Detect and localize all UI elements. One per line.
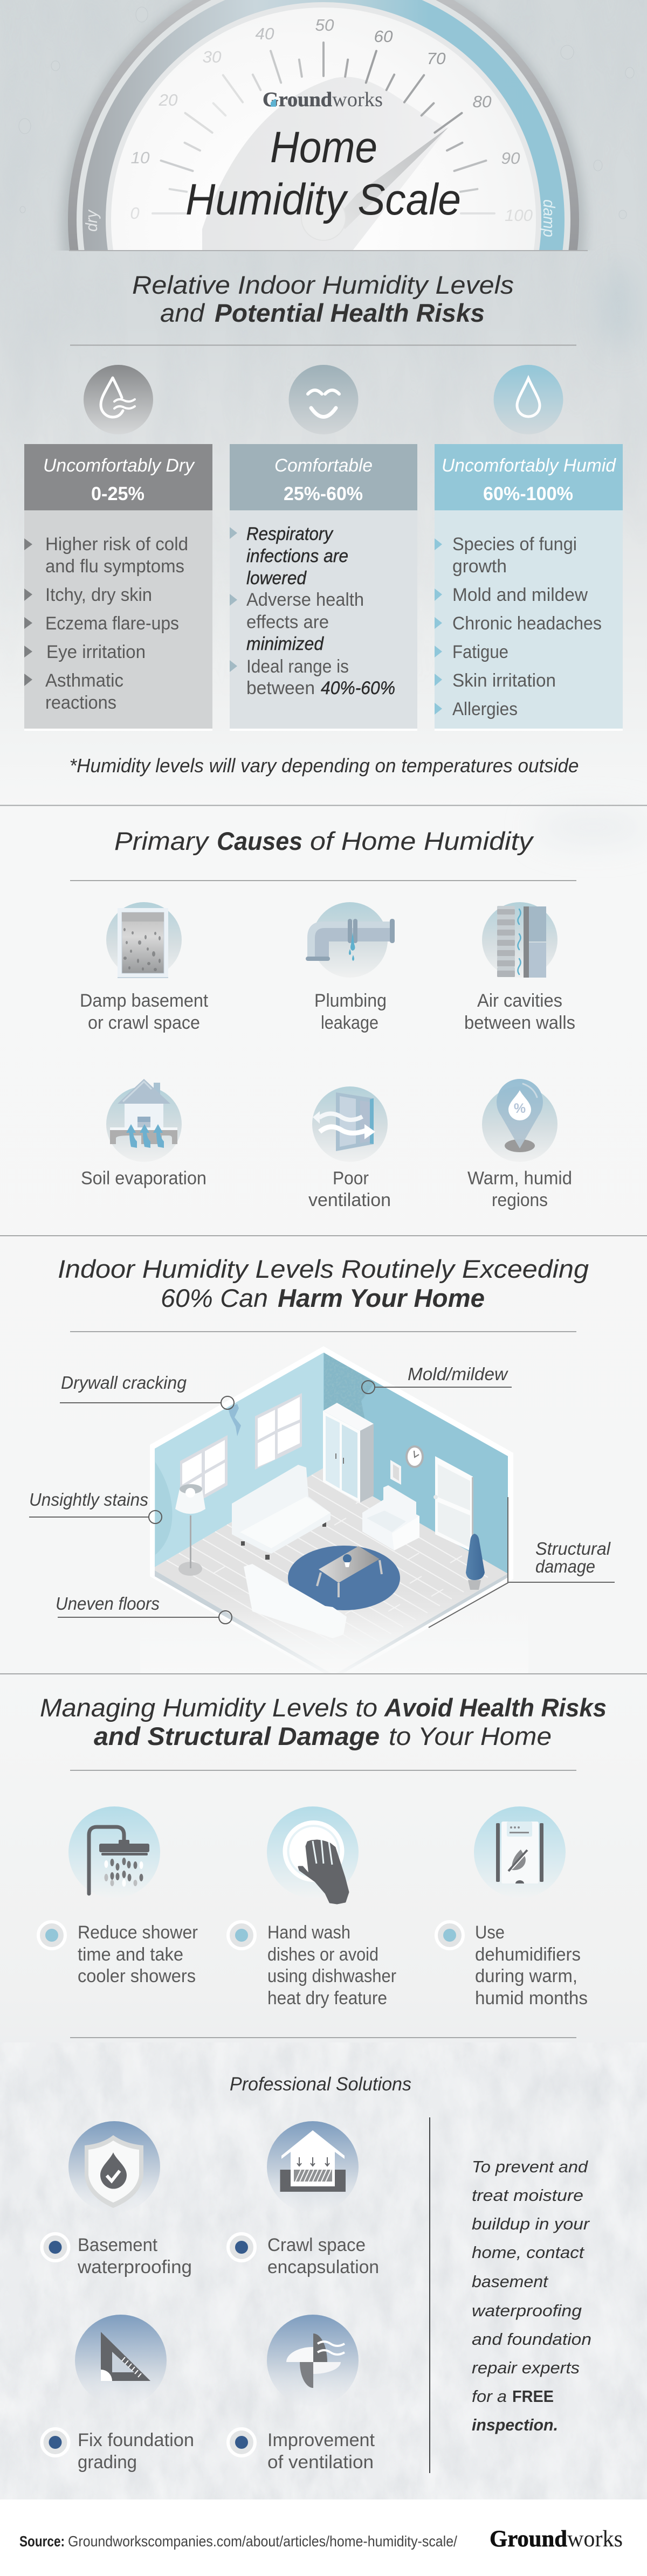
callout: unsightly stains [29, 1490, 162, 1524]
text: using dishwasher [267, 1966, 396, 1986]
gauge base line [69, 250, 588, 251]
footer logo: works [567, 2526, 623, 2552]
panel: uncomfortably dry: and flu symptoms [45, 556, 184, 577]
text: Crawl space [267, 2235, 366, 2255]
panel: comfortable: Comfortable [274, 455, 373, 476]
floor edge [155, 1570, 508, 1679]
panel: uncomfortably humid: 60%-100% [483, 483, 573, 504]
floor fade [140, 1609, 528, 1674]
heading: managing humidity levels: to Your Home [389, 1722, 552, 1750]
wall stain [155, 1462, 173, 1555]
isometric room illustration [150, 1346, 513, 1661]
heading: relative indoor humidity levels: Potential Health Risks [215, 299, 485, 327]
panel: comfortable: 25%-60% [284, 483, 363, 504]
callout: uneven floors: Uneven floors [56, 1594, 160, 1614]
text: heat dry feature [267, 1988, 387, 2009]
text: encapsulation [267, 2257, 379, 2277]
heading: primary causes: Causes [217, 827, 302, 855]
gauge needle [344, 127, 449, 228]
plant [466, 1534, 485, 1590]
text [78, 1922, 198, 1986]
heading: managing humidity levels: Managing Humidity Levels to [40, 1693, 377, 1722]
text: humid months [475, 1988, 588, 2009]
right wall [324, 1353, 508, 1575]
panel: uncomfortably humid: growth [452, 556, 507, 577]
call to action: repair experts [472, 2358, 580, 2377]
left wall [155, 1353, 324, 1567]
label: leakage [321, 1013, 378, 1033]
solution: improvement of ventilation [228, 2315, 375, 2473]
panel: uncomfortably humid: Mold and mildew [452, 585, 588, 605]
rim label dry: dry [82, 209, 101, 232]
gauge numbers: 90 [501, 149, 520, 168]
panel: uncomfortably humid: Allergies [452, 699, 518, 719]
text: Improvement [267, 2430, 375, 2450]
solution: crawl space encapsulation [228, 2121, 379, 2277]
panel: comfortable [230, 444, 417, 731]
heading: harm your home: Harm Your Home [278, 1284, 485, 1312]
label [308, 1168, 391, 1210]
label: Poor [333, 1168, 369, 1189]
panel: uncomfortably humid: Fatigue [452, 642, 508, 662]
call to action: buildup in your [472, 2214, 590, 2233]
panel: uncomfortably dry: Itchy, dry skin [45, 585, 152, 605]
text: dehumidifiers [475, 1944, 581, 1965]
label: Damp basement [80, 991, 209, 1011]
panel: comfortable: Adverse health [246, 590, 364, 610]
gauge numbers: 50 [315, 16, 334, 34]
heading: managing humidity levels: and Structural Damage [94, 1722, 380, 1750]
heading: primary causes [114, 827, 534, 855]
bullet [436, 1922, 463, 1949]
text [267, 2235, 379, 2277]
heading: professional solutions: Professional Solutions [230, 2074, 411, 2095]
water droplets [19, 7, 634, 219]
floor [155, 1468, 508, 1675]
heading: relative indoor humidity levels: Relative Indoor Humidity Levels [132, 271, 514, 299]
heading: harm your home: Indoor Humidity Levels Routinely Exceeding [58, 1255, 589, 1283]
gauge numbers: 80 [472, 92, 492, 111]
footnote: *Humidity levels will vary depending on temperatures outside [69, 754, 579, 777]
heading: primary causes: of Home Humidity [310, 827, 534, 855]
text: Reduce shower [78, 1922, 198, 1943]
bullet [228, 2234, 255, 2261]
callout: drywall cracking [60, 1373, 234, 1409]
label: Soil evaporation [81, 1168, 207, 1189]
heading: harm your home: 60% Can [161, 1284, 268, 1312]
gauge numbers [130, 16, 533, 225]
text: during warm, [475, 1966, 577, 1986]
gauge numbers: 0 [130, 204, 140, 223]
panel: uncomfortably humid: Chronic headaches [452, 613, 602, 634]
text: waterproofing [77, 2257, 192, 2277]
call to action: home, contact [472, 2243, 584, 2262]
panel: comfortable: minimized [246, 634, 324, 654]
gauge ticks [153, 43, 494, 213]
tip: dehumidifier [436, 1806, 588, 2009]
cause: poor ventilation [308, 1086, 391, 1210]
call to action: waterproofing [472, 2301, 582, 2320]
side window [180, 1435, 228, 1512]
call to action: inspection. [472, 2415, 558, 2434]
label: Air cavities [477, 991, 562, 1011]
text: dishes or avoid [267, 1944, 378, 1965]
dial shadow [202, 77, 448, 253]
gauge numbers: 10 [130, 148, 150, 167]
bullet [42, 2429, 69, 2456]
text: Use [475, 1922, 505, 1943]
source line: Groundworkscompanies.com/about/articles/home-humidity-scale/ [68, 2533, 457, 2550]
text [267, 2430, 375, 2473]
panel: comfortable: lowered [246, 568, 307, 588]
callout: mold/mildew: Mold/mildew [408, 1364, 508, 1384]
gauge [58, 0, 589, 251]
panel: uncomfortably humid: Skin irritation [452, 670, 556, 691]
callout: mold/mildew [362, 1364, 512, 1394]
logo [263, 88, 383, 111]
callout: drywall cracking: Drywall cracking [61, 1373, 187, 1393]
cause: warm humid regions [467, 1079, 572, 1210]
logo: Ground [263, 88, 332, 111]
text: Basement [78, 2235, 158, 2255]
bullet [228, 2429, 255, 2456]
call to action: treat moisture [472, 2186, 583, 2205]
callout: uneven floors [56, 1594, 232, 1624]
panel: uncomfortably dry [24, 444, 212, 731]
wardrobe [323, 1403, 374, 1502]
label: Plumbing [314, 991, 387, 1011]
panel: comfortable: Ideal range is [246, 656, 349, 677]
heading: relative indoor humidity levels: and [160, 299, 205, 327]
title [185, 123, 461, 224]
callout: structural damage: Structural [535, 1539, 611, 1559]
text: time and take [78, 1944, 183, 1965]
panel: uncomfortably humid [435, 444, 623, 731]
cause: air cavities [464, 902, 575, 1033]
wall clock [405, 1445, 424, 1468]
heading: relative indoor humidity levels [132, 271, 514, 327]
heading: primary causes: Primary [114, 827, 210, 855]
panel: comfortable: effects are [246, 612, 329, 633]
label: regions [492, 1190, 548, 1210]
gauge numbers: 40 [256, 24, 274, 43]
icon: dry drop [84, 365, 153, 434]
text: grading [78, 2452, 137, 2473]
floor planks [167, 1475, 488, 1663]
needle pivot [301, 196, 346, 240]
gauge numbers: 60 [374, 27, 393, 46]
solution: fix foundation grading [42, 2315, 194, 2473]
cause: warm humid regions: % [514, 1101, 526, 1116]
call to action: basement [472, 2272, 548, 2291]
sofa [232, 1465, 331, 1560]
text [267, 1922, 396, 2009]
cause: damp basement [80, 902, 209, 1033]
icon: smile [289, 365, 358, 434]
cause: soil evaporation [81, 1079, 207, 1189]
tip: shower [38, 1806, 198, 1986]
label [314, 991, 387, 1033]
callout: structural damage [429, 1497, 615, 1628]
gauge numbers: 30 [203, 47, 221, 66]
label: or crawl space [88, 1013, 200, 1033]
heading: harm your home [58, 1255, 589, 1312]
panel: uncomfortably dry: Uncomfortably Dry [43, 455, 195, 476]
panel: comfortable: Respiratory [246, 524, 334, 544]
bullet [38, 1922, 65, 1949]
cause: plumbing leakage [306, 902, 395, 1033]
call to action: FREE [512, 2387, 554, 2406]
coffee table [317, 1546, 382, 1597]
panel: uncomfortably dry: Asthmatic [45, 670, 123, 691]
room border [150, 1346, 513, 1622]
panel: uncomfortably humid: Species of fungi [452, 534, 577, 555]
solution: basement waterproofing [42, 2121, 192, 2277]
label: ventilation [308, 1190, 391, 1210]
floor lamp [175, 1484, 205, 1576]
rim label damp: damp [540, 199, 559, 237]
wall vent [390, 1460, 401, 1485]
text: Hand wash [267, 1922, 350, 1943]
panel: comfortable: between [246, 678, 315, 698]
panel: uncomfortably dry: Higher risk of cold [45, 534, 188, 555]
text [77, 2235, 192, 2277]
panel: comfortable: 40%-60% [321, 678, 395, 698]
gauge numbers: 70 [427, 49, 445, 68]
label [80, 991, 209, 1033]
label: Warm, humid [467, 1168, 572, 1189]
heading: managing humidity levels [40, 1693, 607, 1750]
footer logo: Ground [490, 2526, 567, 2552]
armchair [362, 1485, 419, 1550]
title: Humidity Scale [185, 175, 461, 224]
tip: hand wash dishes [228, 1806, 396, 2009]
call to action [472, 2157, 591, 2434]
call to action: and foundation [472, 2330, 591, 2349]
source line: Source: [19, 2533, 65, 2550]
footer logo [490, 2526, 623, 2552]
gauge numbers: 100 [505, 206, 533, 225]
label: between walls [464, 1013, 575, 1033]
panel: uncomfortably dry: Eczema flare-ups [45, 613, 179, 634]
logo: works [332, 88, 383, 111]
panel: uncomfortably dry: reactions [45, 693, 116, 713]
text: of ventilation [267, 2452, 374, 2473]
label [467, 1168, 572, 1210]
back window [255, 1393, 302, 1470]
mold patch [324, 1350, 377, 1425]
door [433, 1456, 473, 1552]
rug [288, 1546, 400, 1610]
text: Fix foundation [78, 2430, 194, 2450]
call to action: To prevent and [472, 2157, 589, 2176]
panel: uncomfortably humid: Uncomfortably Humid [442, 455, 616, 476]
panel: uncomfortably dry: 0-25% [91, 483, 144, 504]
panel: uncomfortably dry: Eye irritation [46, 642, 146, 662]
label [464, 991, 575, 1033]
panel: comfortable: infections are [246, 546, 348, 566]
call to action: for a [472, 2387, 507, 2406]
front sofa [244, 1564, 347, 1638]
callout: unsightly stains: Unsightly stains [29, 1490, 148, 1509]
callout: structural damage: damage [535, 1556, 595, 1576]
bullet [228, 1922, 255, 1949]
gauge numbers: 20 [158, 91, 178, 109]
text: cooler showers [78, 1966, 196, 1986]
bullet [42, 2234, 69, 2261]
icon: humid drop [494, 365, 563, 434]
text [475, 1922, 588, 2009]
title: Home [270, 123, 377, 172]
heading: managing humidity levels: Avoid Health Risks [384, 1693, 607, 1722]
vertical divider [429, 2117, 430, 2473]
text [78, 2430, 194, 2473]
wall crack [228, 1404, 241, 1436]
